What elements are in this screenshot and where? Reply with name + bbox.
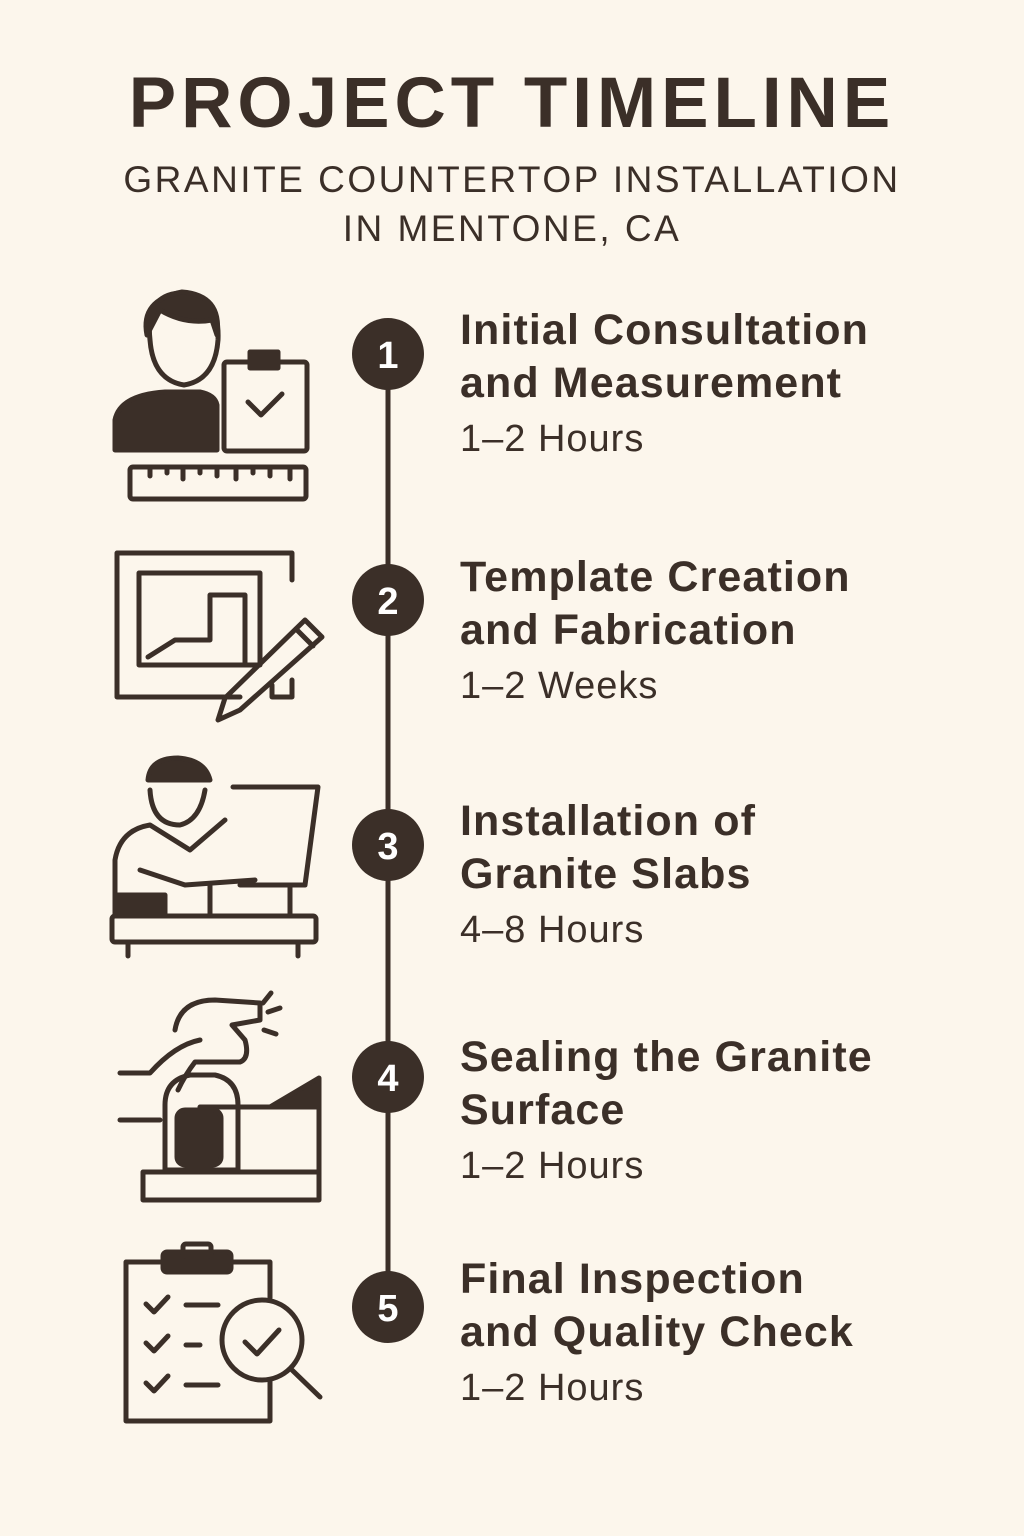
step markers <box>352 318 424 1343</box>
timeline line <box>386 354 390 1307</box>
step 3 text: Granite Slabs <box>460 850 752 898</box>
step 4 text: Surface <box>460 1086 625 1134</box>
step 5 text: 1–2 Hours <box>460 1367 644 1409</box>
step 2 text: 1–2 Weeks <box>460 665 658 707</box>
step 1 text: and Measurement <box>460 359 842 407</box>
subtitle: GRANITE COUNTERTOP INSTALLATION <box>123 159 901 200</box>
step 4 text: 1–2 Hours <box>460 1145 644 1187</box>
step 5 text: Final Inspection <box>460 1255 805 1303</box>
step markers: 3 <box>377 826 399 868</box>
step 2 text: and Fabrication <box>460 606 797 654</box>
step 3 text <box>460 797 756 951</box>
subtitle: IN MENTONE, CA <box>343 208 681 249</box>
step 4 text: Sealing the Granite <box>460 1033 873 1081</box>
icon: installer placing slab <box>112 758 318 956</box>
step 2 text <box>460 553 851 707</box>
step markers: 2 <box>377 581 399 623</box>
step 5 text: and Quality Check <box>460 1308 854 1356</box>
step 5 text <box>460 1255 854 1409</box>
step 1 text: 1–2 Hours <box>460 418 644 460</box>
step 3 text: Installation of <box>460 797 756 845</box>
step markers: 1 <box>377 335 399 377</box>
icon: template blueprint with pencil <box>117 553 322 720</box>
title: PROJECT TIMELINE <box>129 64 895 143</box>
step 4 text <box>460 1033 873 1187</box>
icon: spray bottle sealing <box>120 993 319 1200</box>
step 3 text: 4–8 Hours <box>460 909 644 951</box>
step 2 text: Template Creation <box>460 553 851 601</box>
step markers: 5 <box>377 1288 399 1330</box>
step 1 text <box>460 306 869 460</box>
subtitle <box>123 159 901 249</box>
step markers: 4 <box>377 1058 399 1100</box>
icon: inspection checklist with magnifier <box>126 1244 320 1421</box>
step 1 text: Initial Consultation <box>460 306 869 354</box>
icon: consultant with clipboard and ruler <box>115 292 307 499</box>
